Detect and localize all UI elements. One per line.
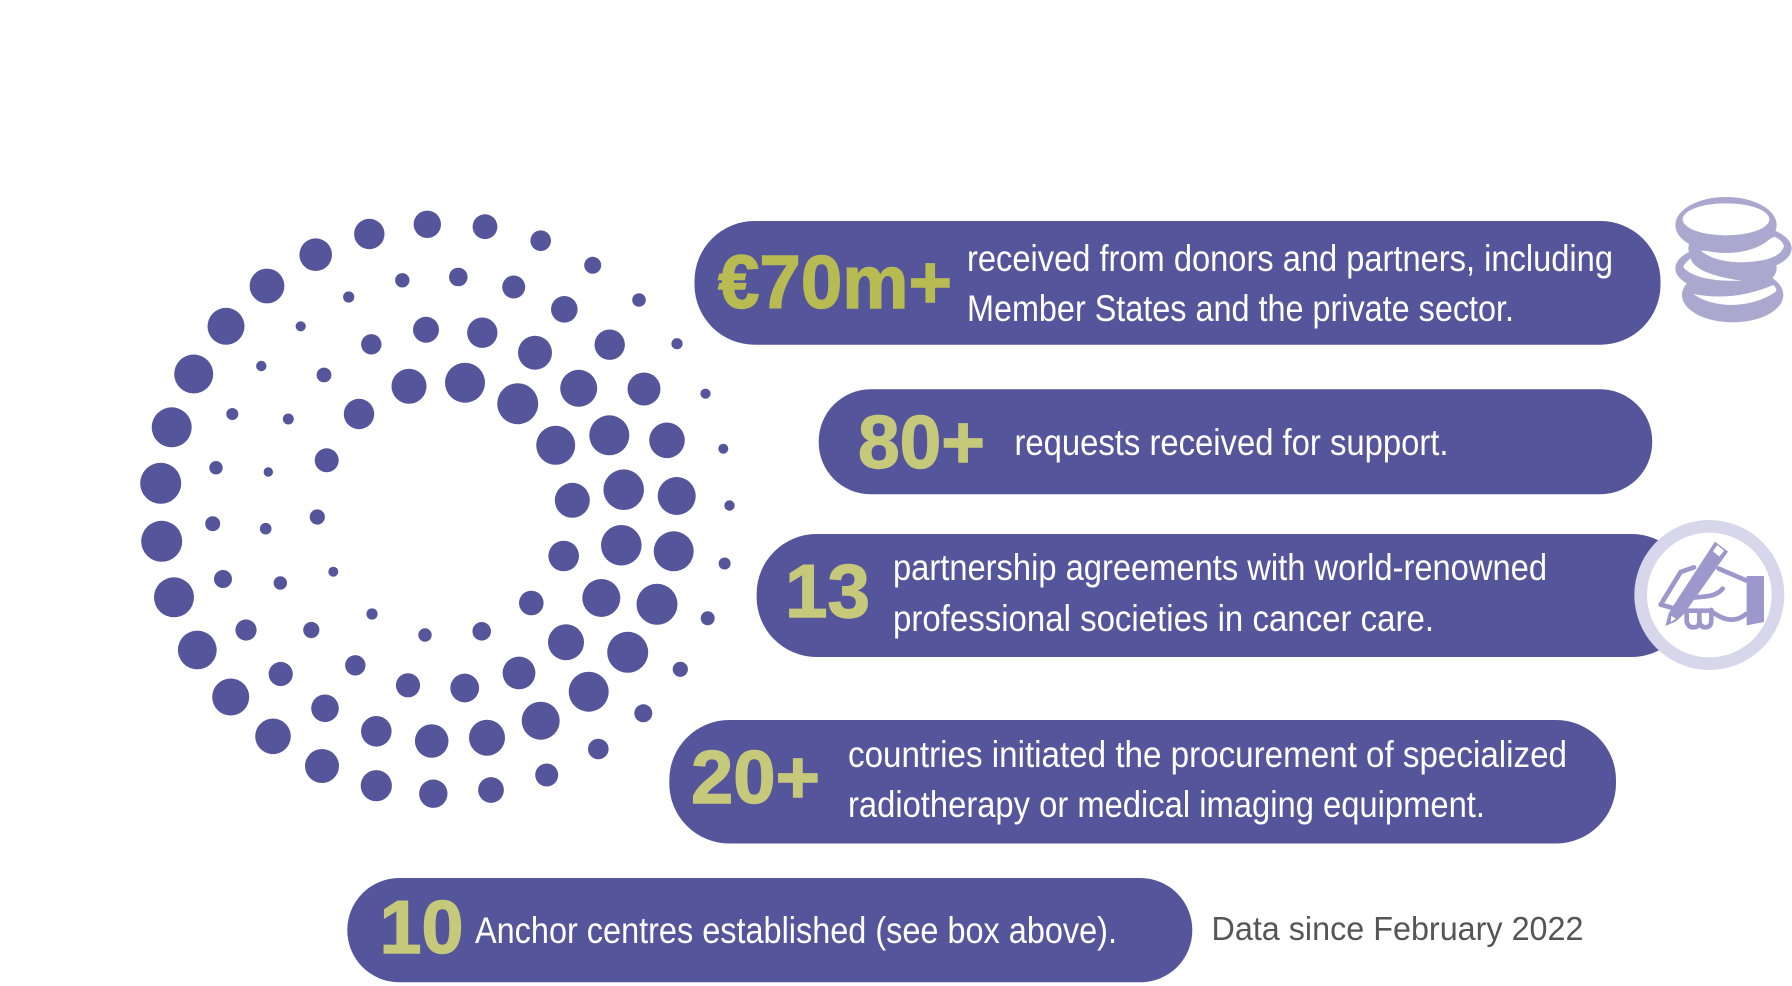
icon: hand writing in ring xyxy=(1641,526,1778,664)
stat pill: 80 requests: requests received for support. xyxy=(1014,422,1448,463)
stat pill: 70m funding: received from donors and partners, including xyxy=(967,238,1613,279)
stat pill: 70m funding: Member States and the private sector. xyxy=(967,288,1514,329)
stat pill: 13 partnership agreements: professional societies in cancer care. xyxy=(893,598,1434,639)
dotted circle graphic xyxy=(140,211,735,808)
stat pill: 20 countries xyxy=(669,720,1616,844)
stat pill: 20 countries: radiotherapy or medical imaging equipment. xyxy=(848,784,1485,825)
stat pill: 13 partnership agreements xyxy=(757,534,1692,657)
stat pill: 13 partnership agreements: 13 xyxy=(785,549,870,633)
stat pill: 80 requests: 80+ xyxy=(858,400,985,484)
stat pill: 10 anchor centres: Anchor centres established (see box above). xyxy=(475,910,1117,951)
stat pill: 10 anchor centres: 10 xyxy=(380,885,464,969)
data note: Data since February 2022 xyxy=(1212,910,1584,947)
icon: coin stack xyxy=(1675,197,1792,322)
stat pill: 13 partnership agreements: partnership agreements with world-renowned xyxy=(893,547,1547,588)
stat pill: 10 anchor centres xyxy=(347,878,1192,982)
stat pill: 70m funding xyxy=(694,221,1660,345)
stat pill: 20 countries: 20+ xyxy=(691,735,820,819)
stat pill: 80 requests xyxy=(819,389,1652,494)
stat pill: 70m funding: €70m+ xyxy=(718,240,952,324)
stat pill: 20 countries: countries initiated the procurement of specialized xyxy=(848,734,1567,775)
